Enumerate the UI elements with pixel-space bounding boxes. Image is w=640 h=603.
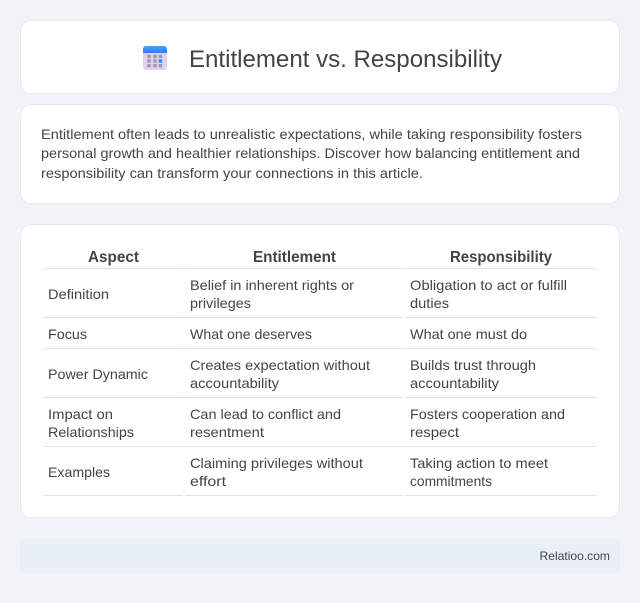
row: power dynamic: accountability (190, 375, 279, 391)
row: power dynamic: Builds trust through (410, 357, 536, 373)
panel: comparison table (20, 224, 620, 518)
row: power dynamic (48, 357, 536, 391)
row: definition: Obligation to act or fulfill (410, 277, 567, 293)
table header: Aspect (88, 249, 140, 266)
row: examples (48, 455, 548, 489)
row: power dynamic: Creates expectation without (190, 357, 370, 373)
panel: introduction (20, 104, 620, 204)
heading: Entitlement vs. Responsibility (189, 46, 502, 73)
icon: calendar (143, 46, 167, 70)
row: impact on relationships: respect (410, 424, 459, 440)
row: examples: commitments (410, 473, 492, 489)
row: power dynamic: Power Dynamic (48, 366, 148, 382)
table header: Entitlement (253, 249, 337, 266)
row: impact on relationships: Relationships (48, 424, 134, 440)
table header: Responsibility (450, 249, 552, 266)
row: examples: effort (190, 473, 226, 489)
row: power dynamic: accountability (410, 375, 499, 391)
row: impact on relationships: Fosters cooperation and (410, 406, 565, 422)
intro text: personal growth and healthier relationships. Discover how balancing entitlement and (41, 145, 580, 161)
row: impact on relationships: Impact on (48, 406, 113, 422)
footer (20, 539, 620, 573)
row: examples: Examples (48, 464, 110, 480)
row: definition (48, 277, 567, 311)
row: focus: What one must do (410, 326, 527, 342)
row: definition: Belief in inherent rights or (190, 277, 354, 293)
row: examples: Taking action to meet (410, 455, 548, 471)
row: examples: Claiming privileges without (190, 455, 363, 471)
row: impact on relationships: Can lead to conflict and (190, 406, 341, 422)
row: impact on relationships: resentment (190, 424, 264, 440)
intro text: Entitlement often leads to unrealistic expectations, while taking responsibility fosters (41, 126, 582, 142)
row: definition: duties (410, 295, 449, 311)
row: impact on relationships (48, 406, 565, 440)
row: focus (48, 326, 527, 342)
footer: Relatioo.com (540, 549, 610, 563)
row: focus: Focus (48, 326, 87, 342)
row: definition: Definition (48, 286, 109, 302)
intro text: responsibility can transform your connections in this article. (41, 165, 423, 181)
table header (88, 249, 552, 266)
row: focus: What one deserves (190, 326, 312, 342)
panel: title (20, 20, 620, 94)
intro text (41, 126, 582, 181)
row: definition: privileges (190, 295, 251, 311)
